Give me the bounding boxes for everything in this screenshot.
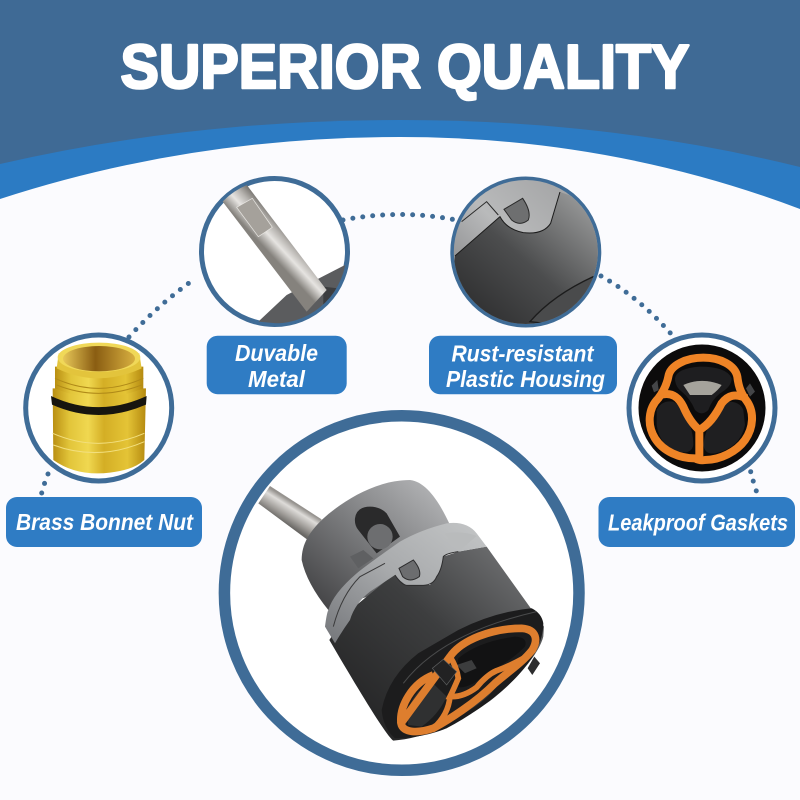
orange gasket <box>650 358 752 460</box>
header banner <box>0 0 800 230</box>
label: duvable metal <box>207 336 347 394</box>
orange seal <box>401 628 536 732</box>
housing <box>258 265 345 324</box>
end face <box>382 608 543 738</box>
main circle: cartridge <box>224 416 579 770</box>
seal pockets <box>457 637 526 687</box>
label: rust-resistant plastic housing: Rust-resistant <box>452 340 595 366</box>
label: duvable metal: Duvable <box>235 340 318 366</box>
dotted connectors <box>42 214 756 493</box>
label: leakproof gaskets <box>598 497 795 547</box>
small drop slot <box>399 560 420 580</box>
metal shaft <box>258 486 322 542</box>
light band <box>325 523 487 643</box>
slot <box>355 507 400 553</box>
label: rust-resistant plastic housing: Plastic Housing <box>446 366 605 392</box>
label: brass bonnet nut: Brass Bonnet Nut <box>16 509 194 535</box>
pockets <box>675 367 732 413</box>
circle: leakproof gaskets <box>629 335 775 481</box>
title: SUPERIOR QUALITY <box>120 33 690 102</box>
circle: plastic housing <box>447 173 603 330</box>
circle: brass bonnet nut <box>26 335 172 481</box>
tab and pin <box>432 659 457 685</box>
upper cylinder <box>302 480 450 610</box>
label: rust-resistant plastic housing <box>429 336 617 394</box>
brass body <box>53 388 146 473</box>
label: duvable metal: Metal <box>248 366 306 392</box>
lower dark body <box>329 547 544 741</box>
label: brass bonnet nut <box>6 497 202 547</box>
circle: durable metal shaft <box>202 172 350 330</box>
shaft <box>222 185 327 312</box>
